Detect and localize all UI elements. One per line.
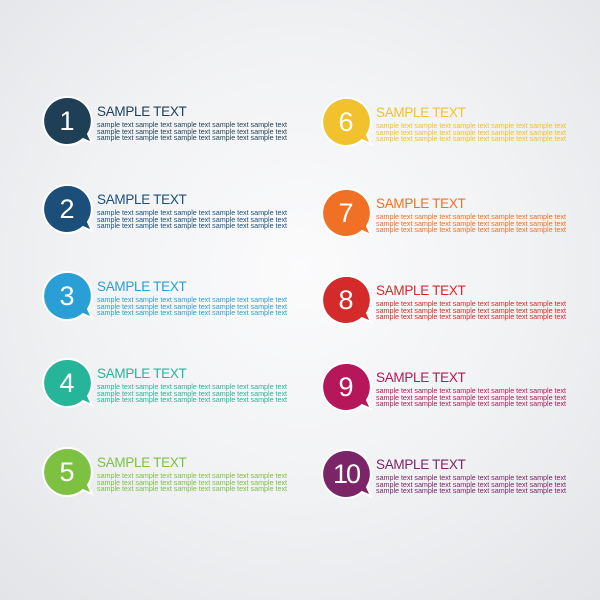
- text 5: [97, 471, 287, 493]
- text 3: [97, 295, 287, 317]
- text 6: [376, 121, 566, 143]
- icon: bubble 10: [321, 449, 372, 499]
- text 8: [376, 299, 566, 321]
- text 9: sample text sample text sample text sample text sample text: [376, 399, 566, 408]
- text 4: sample text sample text sample text sample text sample text: [97, 395, 287, 404]
- text 6: sample text sample text sample text sample text sample text: [376, 128, 566, 137]
- text 2: sample text sample text sample text sample text sample text: [97, 208, 287, 217]
- icon: bubble 2: [42, 184, 94, 234]
- text 5: sample text sample text sample text sample text sample text: [97, 484, 287, 493]
- icon: bubble 3: [42, 271, 94, 321]
- text 10: sample text sample text sample text sample text sample text: [376, 473, 566, 482]
- text 2: sample text sample text sample text sample text sample text: [97, 215, 287, 224]
- text 8: sample text sample text sample text sample text sample text: [376, 306, 566, 315]
- heading 9: SAMPLE TEXT: [376, 370, 465, 385]
- heading 3: SAMPLE TEXT: [97, 279, 186, 294]
- text 1: sample text sample text sample text sample text sample text: [97, 133, 287, 142]
- text 2: [97, 208, 287, 230]
- heading 2: SAMPLE TEXT: [97, 192, 186, 207]
- item 1: [42, 96, 287, 146]
- text 3: sample text sample text sample text sample text sample text: [97, 302, 287, 311]
- text 8: sample text sample text sample text sample text sample text: [376, 312, 566, 321]
- item 5: [42, 447, 287, 497]
- heading 8: SAMPLE TEXT: [376, 283, 465, 298]
- text 10: sample text sample text sample text sample text sample text: [376, 486, 566, 495]
- heading 1: SAMPLE TEXT: [97, 104, 186, 119]
- icon: bubble 6: [321, 97, 372, 147]
- item 8: [323, 277, 566, 323]
- icon: bubble 9: [322, 362, 372, 412]
- text 7: sample text sample text sample text sample text sample text: [376, 225, 566, 234]
- text 6: sample text sample text sample text sample text sample text: [376, 134, 566, 143]
- item 4: 4: [59, 368, 75, 398]
- icon: bubble 8: [323, 277, 370, 323]
- item 1: 1: [59, 106, 75, 136]
- item 5: 5: [59, 457, 75, 487]
- text 9: sample text sample text sample text sample text sample text: [376, 386, 566, 395]
- text 7: [376, 212, 566, 234]
- text 5: sample text sample text sample text sample text sample text: [97, 478, 287, 487]
- item 10: 10: [333, 459, 359, 489]
- item 7: [323, 188, 566, 236]
- item 6: [321, 97, 566, 147]
- text 9: sample text sample text sample text sample text sample text: [376, 393, 566, 402]
- icon: bubble 4: [42, 358, 94, 408]
- item 2: 2: [59, 194, 75, 224]
- text 7: sample text sample text sample text sample text sample text: [376, 219, 566, 228]
- text 2: sample text sample text sample text sample text sample text: [97, 221, 287, 230]
- item 2: [42, 184, 287, 234]
- text 4: sample text sample text sample text sample text sample text: [97, 389, 287, 398]
- item 6: 6: [338, 107, 354, 137]
- text 3: sample text sample text sample text sample text sample text: [97, 295, 287, 304]
- text 4: sample text sample text sample text sample text sample text: [97, 382, 287, 391]
- text 8: sample text sample text sample text sample text sample text: [376, 299, 566, 308]
- item 3: 3: [59, 281, 75, 311]
- text 5: sample text sample text sample text sample text sample text: [97, 471, 287, 480]
- item 3: [42, 271, 287, 321]
- text 7: sample text sample text sample text sample text sample text: [376, 212, 566, 221]
- text 10: [376, 473, 566, 495]
- icon: bubble 7: [323, 188, 372, 236]
- text 3: sample text sample text sample text sample text sample text: [97, 308, 287, 317]
- heading 10: SAMPLE TEXT: [376, 457, 465, 472]
- item 9: [322, 362, 566, 412]
- icon: bubble 5: [42, 447, 94, 497]
- heading 5: SAMPLE TEXT: [97, 455, 186, 470]
- text 4: [97, 382, 287, 404]
- text 6: sample text sample text sample text sample text sample text: [376, 121, 566, 130]
- text 1: sample text sample text sample text sample text sample text: [97, 127, 287, 136]
- text 1: sample text sample text sample text sample text sample text: [97, 120, 287, 129]
- item 10: [321, 449, 566, 499]
- item 9: 9: [338, 372, 354, 402]
- item 8: 8: [338, 285, 354, 315]
- item 7: 7: [338, 198, 354, 228]
- heading 6: SAMPLE TEXT: [376, 105, 465, 120]
- text 10: sample text sample text sample text sample text sample text: [376, 480, 566, 489]
- text 9: [376, 386, 566, 408]
- heading 4: SAMPLE TEXT: [97, 366, 186, 381]
- item 4: [42, 358, 287, 408]
- heading 7: SAMPLE TEXT: [376, 196, 465, 211]
- text 1: [97, 120, 287, 142]
- icon: bubble 1: [42, 96, 94, 146]
